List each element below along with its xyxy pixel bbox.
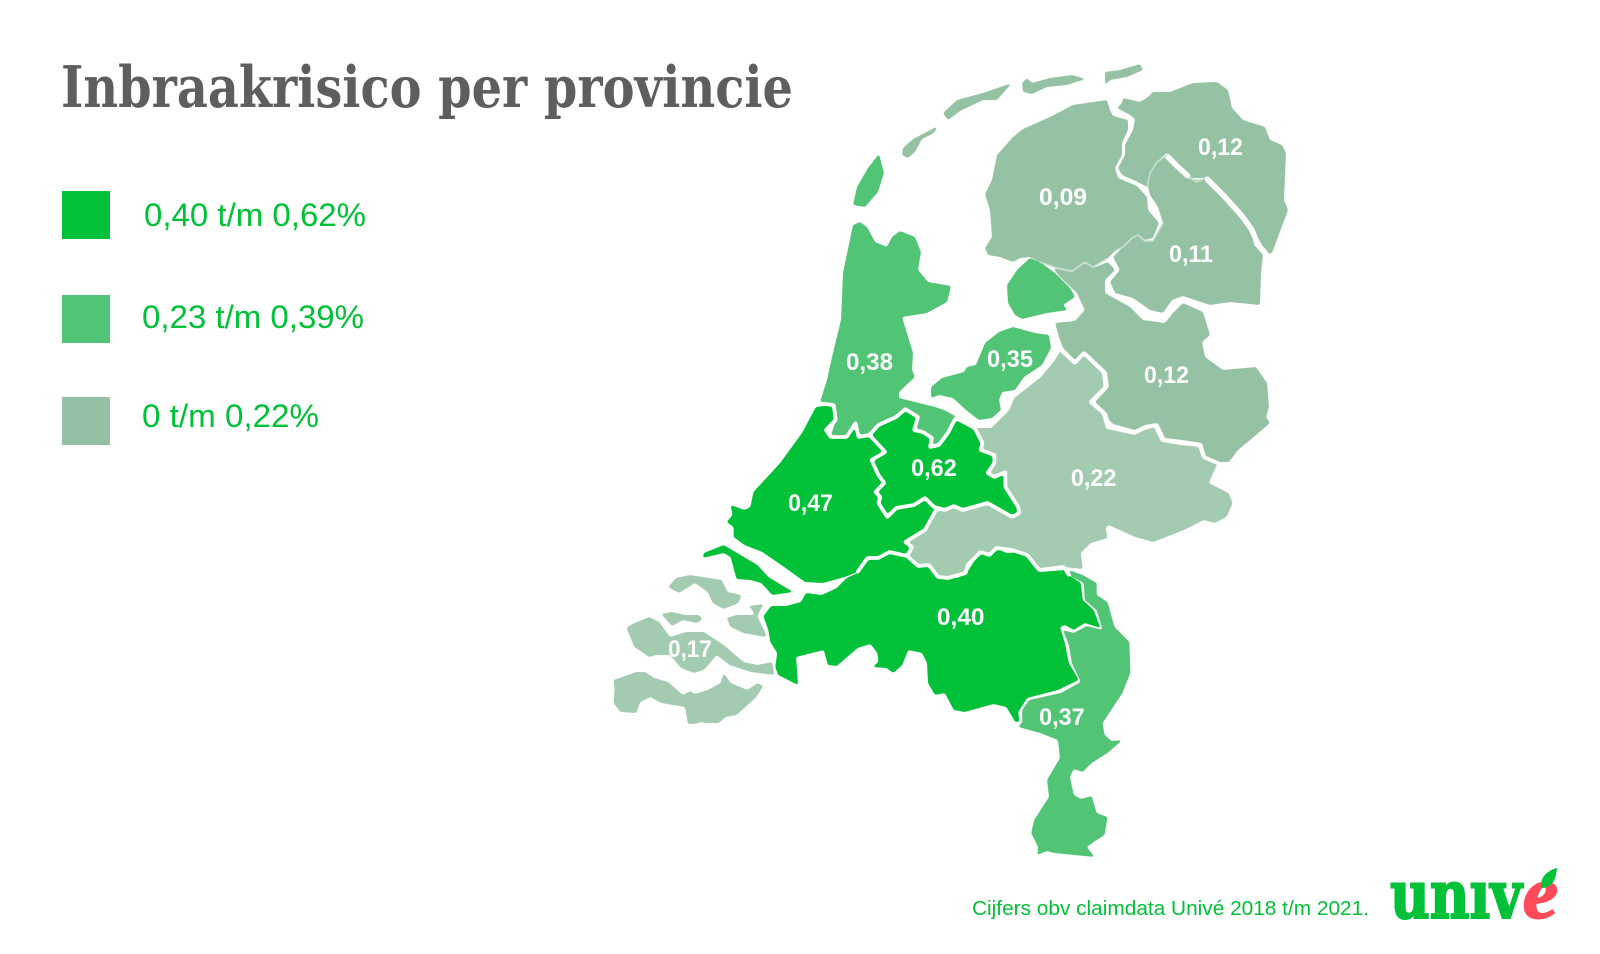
legend swatch: low risk — [62, 397, 110, 445]
province: Gelderland — [905, 350, 1233, 578]
logo: Univé: unıv — [1390, 856, 1523, 934]
province: Flevoland: 0,35 — [987, 346, 1033, 373]
province: Zuid-Holland: 0,47 — [788, 490, 833, 517]
legend — [62, 191, 366, 445]
province: Noord-Brabant — [763, 548, 1101, 722]
province: Limburg — [1018, 570, 1130, 857]
province: Flevoland — [931, 258, 1075, 420]
source note: Cijfers obv claimdata Univé 2018 t/m 2021. — [972, 898, 1369, 920]
province: Overijssel — [1053, 262, 1270, 462]
legend swatch: high risk — [62, 191, 110, 239]
logo: Univé: e — [1523, 853, 1558, 935]
province: Groningen — [1117, 82, 1288, 254]
province: Noord-Holland: 0,38 — [846, 349, 893, 376]
legend label: high risk: 0,40 t/m 0,62% — [144, 197, 366, 233]
province: Utrecht: 0,62 — [911, 455, 957, 482]
province: Zuid-Holland — [703, 405, 936, 595]
province: Friesland: 0,09 — [1039, 184, 1087, 211]
legend label: low risk: 0 t/m 0,22% — [142, 398, 319, 434]
province: Noord-Holland — [820, 222, 957, 446]
title: Inbraakrisico per provincie — [61, 54, 793, 121]
province: Wadden islands — [853, 64, 1143, 207]
province: Zeeland — [614, 575, 774, 724]
legend swatch: medium risk — [62, 295, 110, 343]
southern provinces — [614, 350, 1233, 857]
province: Limburg: 0,37 — [1039, 704, 1085, 731]
province: Overijssel: 0,12 — [1144, 362, 1189, 389]
province: Drenthe — [1110, 155, 1263, 313]
province: Friesland — [985, 100, 1159, 271]
province: Utrecht — [869, 409, 1019, 517]
province: Zeeland: 0,17 — [668, 636, 712, 663]
province: Groningen: 0,12 — [1198, 134, 1243, 161]
province: Noord-Brabant: 0,40 — [937, 604, 985, 631]
legend label: medium risk: 0,23 t/m 0,39% — [142, 299, 364, 335]
map of the Netherlands — [614, 64, 1288, 857]
province: Gelderland: 0,22 — [1071, 465, 1116, 492]
province: Drenthe: 0,11 — [1169, 241, 1213, 268]
